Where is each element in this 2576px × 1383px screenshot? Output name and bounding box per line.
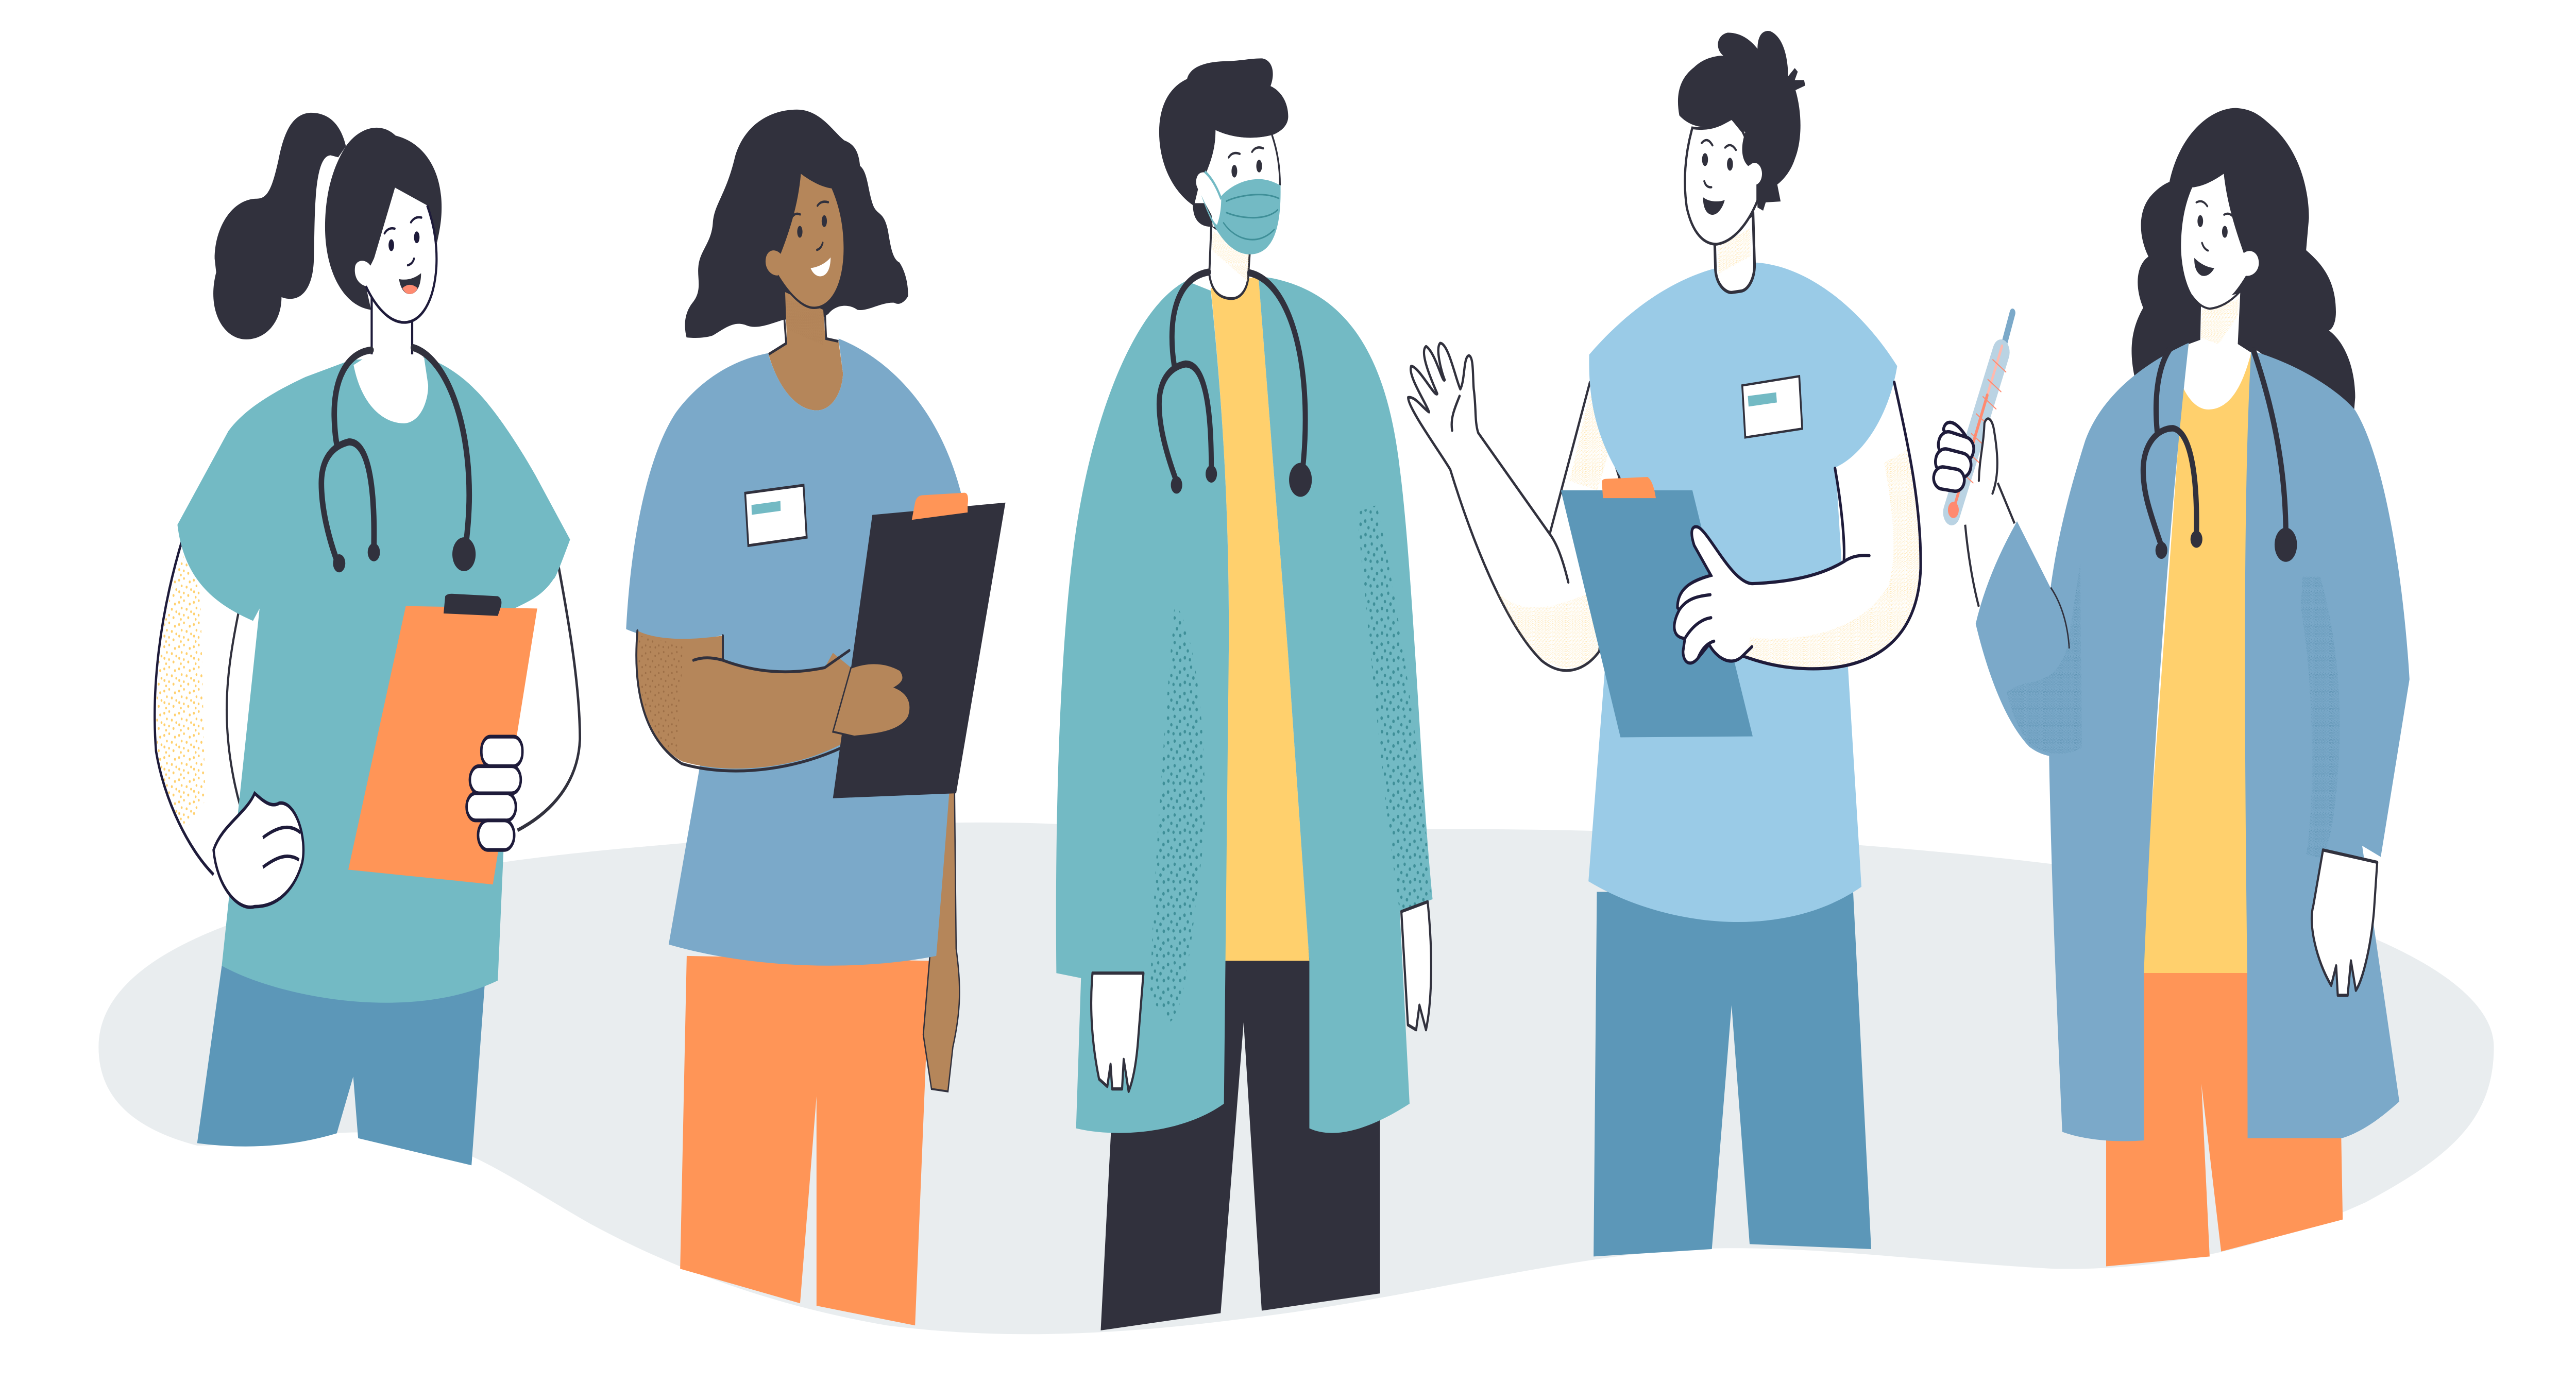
trousers [680,956,930,1325]
far arm and holding hand [1674,366,1921,669]
name badge [1742,376,1802,437]
trousers [1594,892,1871,1256]
neck [2183,293,2251,389]
thermometer [1948,313,2012,518]
coat [1056,276,1433,1133]
hair [325,128,442,310]
head and stethoscope [213,113,476,572]
raised arm [1965,481,2015,607]
neck [769,292,843,411]
hair [1678,31,1805,211]
shirt [626,338,964,966]
right hand [2312,850,2377,995]
hair [685,110,908,338]
left hand [1091,973,1143,1091]
ear [1196,173,1221,225]
hair [2131,108,2355,419]
neck [1209,225,1250,299]
face mask [1201,172,1281,254]
shirt [177,357,570,1003]
ponytail [213,113,346,339]
head and stethoscope [1159,58,1312,497]
hand over clipboard [833,663,910,737]
figure 4: male nurse waving with blue clipboard [1408,31,1921,1256]
name badge [745,485,807,545]
stethoscope [321,348,476,572]
trousers [197,966,485,1165]
figure 1: nurse with ponytail and orange clipboard [155,113,580,1165]
right hand [1401,902,1431,1030]
face [1685,118,1757,244]
background blob [98,823,2494,1334]
left sleeve [1976,521,2082,757]
hair [1159,58,1288,227]
right arm [477,554,580,830]
coat [2048,343,2410,1141]
right hand [467,737,522,850]
left arm and hand [636,630,909,771]
shirt [1588,263,1897,922]
eyes [1229,147,1263,178]
waving arm [1408,343,1620,671]
left arm [155,539,255,875]
lower right arm and hand [923,789,959,1091]
stethoscope [1159,272,1312,497]
figure 3: doctor in teal coat with face mask [1056,58,1433,1330]
yellow shirt [2140,344,2253,973]
left hand [214,793,303,907]
holding hand [1933,419,2082,757]
clipboard [348,594,537,884]
facial features [1702,140,1736,215]
facial features [793,202,831,276]
neck [353,298,428,423]
figure 5: doctor in blue coat holding a thermometer [1933,108,2410,1266]
facial features [384,217,421,294]
ear [1747,163,1762,185]
neck scoop [2183,344,2251,409]
face [1207,130,1280,227]
face [2181,174,2259,308]
trousers [1100,948,1380,1330]
facial features [2194,201,2232,276]
neck [1715,214,1755,293]
clipboard [833,493,1006,798]
upper body [626,110,964,966]
face [766,174,843,306]
trousers [2106,948,2343,1266]
clipboard [1561,477,1753,737]
stethoscope [2143,347,2297,562]
face [355,187,436,322]
yellow shirt [1211,276,1309,961]
figure 2: nurse with dark curly hair and black clipboard [626,110,1006,1325]
